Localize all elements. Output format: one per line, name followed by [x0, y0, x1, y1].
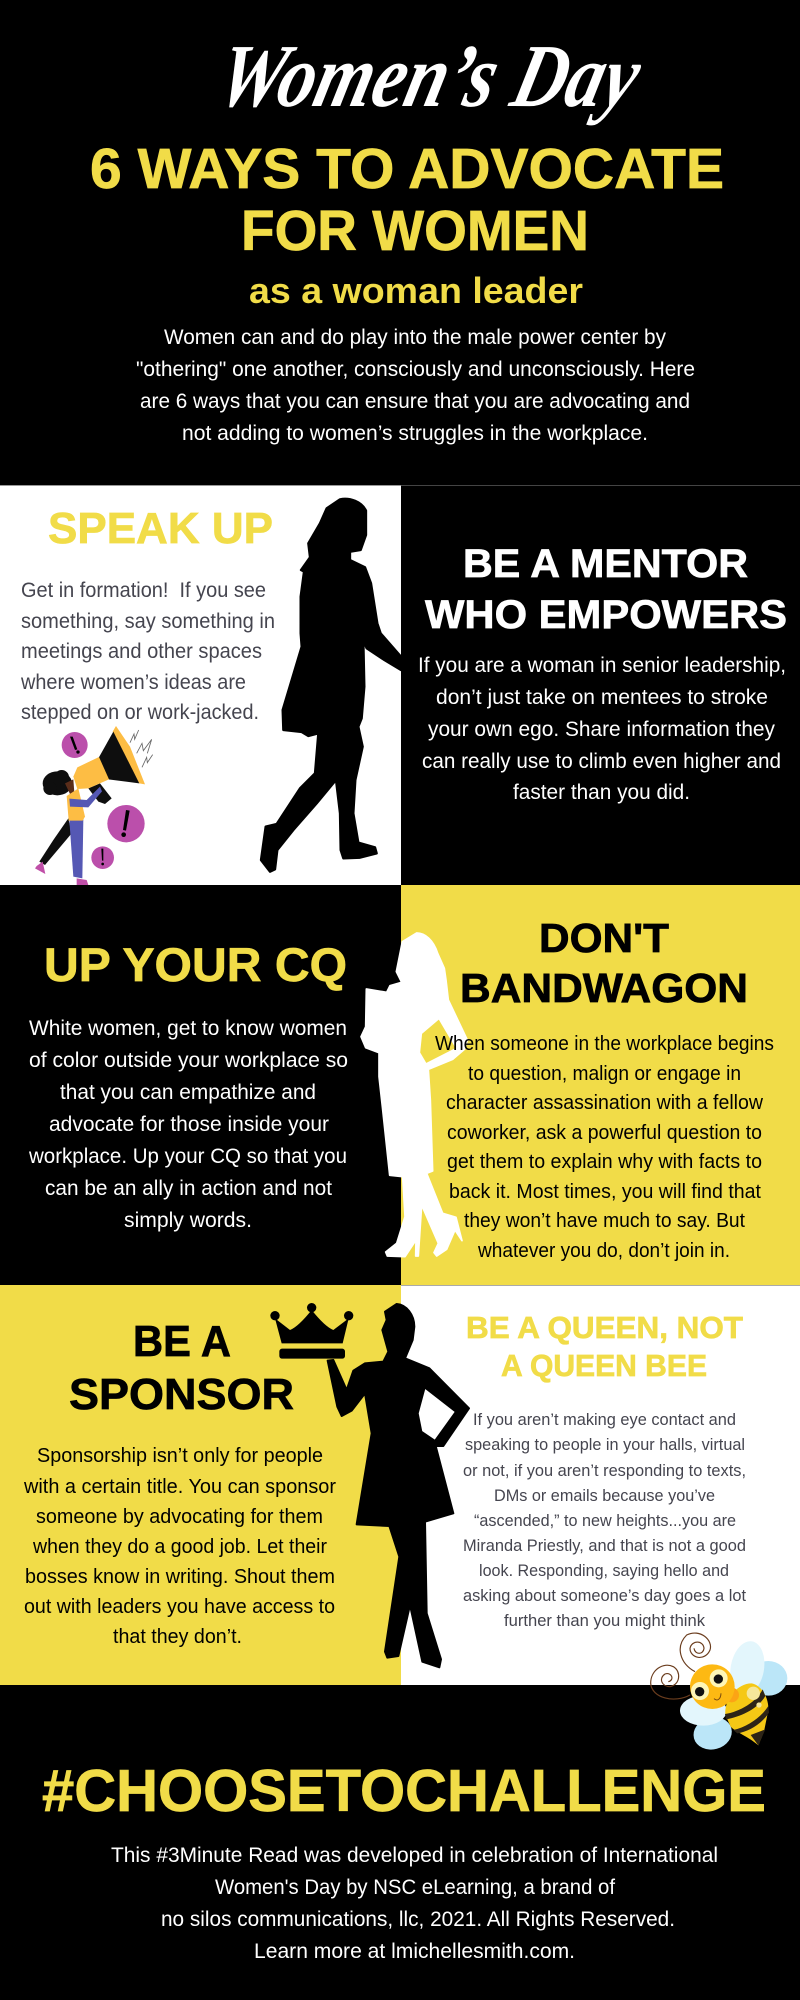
text: don't bandwagon: whatever you do, don’t join in. [477, 1240, 730, 1262]
text: be a sponsor: bosses know in writing. Shout them [25, 1565, 335, 1588]
text: don't bandwagon [435, 1033, 774, 1262]
heading: speak up: SPEAK UP [48, 504, 273, 553]
text: up your cq: workplace. Up your CQ so that you [28, 1145, 347, 1168]
text: be a queen: look. Responding, saying hello and [479, 1561, 729, 1580]
text: don't bandwagon: character assassination with a fellow [446, 1092, 764, 1114]
main heading: FOR WOMEN [241, 199, 589, 263]
text: be a mentor: don’t just take on mentees to stroke [436, 686, 768, 709]
text: be a queen: Miranda Priestly, and that is not a good [463, 1536, 746, 1555]
heading: be a sponsor: SPONSOR [69, 1370, 294, 1419]
row 1: speak up and mentor [0, 485, 800, 885]
heading: up your cq: UP YOUR CQ [44, 938, 347, 991]
heading: be a queen [466, 1310, 743, 1383]
text: speak up: meetings and other spaces [21, 640, 262, 663]
heading: be a mentor: BE A MENTOR [463, 542, 748, 586]
text: be a mentor [418, 654, 786, 804]
subheading: as a woman leader [249, 270, 583, 311]
text: be a queen: If you aren’t making eye contact and [473, 1410, 736, 1429]
text: be a sponsor: with a certain title. You can sponsor [23, 1475, 336, 1498]
text: speak up [20, 579, 275, 724]
text: be a queen: further than you might think [504, 1611, 706, 1630]
main heading: 6 WAYS TO ADVOCATE [90, 137, 724, 201]
panel: speak up background [0, 485, 401, 885]
text: be a queen: DMs or emails because you’ve [494, 1486, 715, 1505]
intro paragraph [136, 325, 695, 445]
text: be a queen: asking about someone’s day goes a lot [463, 1586, 746, 1605]
text: up your cq: White women, get to know women [29, 1017, 347, 1040]
text: don't bandwagon: to question, malign or engage in [468, 1063, 741, 1085]
text: don't bandwagon: When someone in the workplace begins [435, 1033, 774, 1055]
panel: be a mentor background [401, 485, 800, 885]
icon: woman with megaphone [35, 726, 153, 885]
silhouette: woman with folder [361, 933, 467, 1257]
footer credits text: no silos communications, llc, 2021. All Rights Reserved. [161, 1908, 675, 1931]
text: up your cq: of color outside your workplace so [29, 1049, 348, 1072]
text: up your cq: advocate for those inside your [49, 1113, 329, 1136]
heading: don't bandwagon [460, 915, 748, 1011]
text: speak up: something, say something in [21, 610, 275, 633]
footer credits text: Learn more at lmichellesmith.com. [254, 1940, 575, 1963]
row 2: up your CQ and don't bandwagon [0, 885, 800, 1285]
text: speak up: Get in formation! If you see [21, 579, 266, 602]
row 3: be a sponsor and queen bee [0, 1285, 800, 1685]
text: be a sponsor: someone by advocating for them [36, 1505, 323, 1528]
icon: crown on tray [270, 1303, 353, 1359]
heading: don't bandwagon: DON'T [539, 915, 669, 961]
text: be a mentor: If you are a woman in senior leadership, [418, 654, 786, 677]
heading: be a mentor [425, 542, 787, 637]
footer hashtag heading: #CHOOSETOCHALLENGE [42, 1758, 766, 1824]
footer credits text: This #3Minute Read was developed in celebration of International [111, 1844, 718, 1867]
text: don't bandwagon: they won’t have much to say. But [464, 1210, 745, 1232]
text: be a queen: speaking to people in your halls, virtual [465, 1435, 745, 1454]
text: don't bandwagon: get them to explain why with facts to [447, 1151, 762, 1173]
text: be a sponsor: that they don’t. [113, 1625, 242, 1648]
icon: bee [651, 1633, 787, 1754]
panel: up your cq background [0, 885, 401, 1285]
footer credits text: Women's Day by NSC eLearning, a brand of [215, 1876, 615, 1899]
text: be a mentor: your own ego. Share information they [428, 718, 775, 741]
text: don't bandwagon: coworker, ask a powerful question to [447, 1122, 762, 1144]
text: be a sponsor: when they do a good job. Let their [32, 1535, 327, 1558]
text: be a queen: or not, if you aren’t responding to texts, [463, 1461, 746, 1480]
text: be a mentor: can really use to climb even higher and [422, 750, 781, 773]
intro paragraph: Women can and do play into the male power center by [164, 325, 666, 349]
text: up your cq [28, 1017, 348, 1232]
intro paragraph: are 6 ways that you can ensure that you are advocating and [140, 389, 690, 413]
text: don't bandwagon: back it. Most times, you will find that [449, 1181, 761, 1203]
silhouette: walking woman [261, 499, 401, 872]
text: be a sponsor: Sponsorship isn’t only for people [37, 1444, 323, 1467]
text: up your cq: simply words. [124, 1209, 252, 1232]
text: be a sponsor [23, 1444, 336, 1648]
text: speak up: stepped on or work-jacked. [21, 701, 259, 724]
text: up your cq: can be an ally in action and not [45, 1177, 332, 1200]
text: speak up: where women’s ideas are [20, 671, 246, 694]
heading: don't bandwagon: BANDWAGON [460, 965, 748, 1011]
script title: Women’s Day [208, 26, 651, 126]
intro paragraph: "othering" one another, consciously and unconsciously. Here [136, 357, 695, 381]
panel: don't bandwagon background [401, 885, 800, 1285]
text: be a queen: “ascended,” to new heights...you are [474, 1511, 736, 1530]
text: be a queen [463, 1410, 746, 1630]
main heading [90, 137, 724, 263]
text: be a sponsor: out with leaders you have access to [24, 1595, 335, 1618]
heading: be a mentor: WHO EMPOWERS [425, 593, 787, 637]
header section [0, 0, 800, 485]
footer section [0, 1685, 800, 2000]
text: up your cq: that you can empathize and [60, 1081, 316, 1104]
silhouette: woman holding tray [328, 1304, 469, 1667]
heading: be a sponsor: BE A [133, 1317, 231, 1366]
intro paragraph: not adding to women’s struggles in the workplace. [182, 421, 648, 445]
footer credits text [111, 1844, 718, 1963]
heading: be a queen: BE A QUEEN, NOT [466, 1310, 743, 1345]
heading: be a sponsor [69, 1317, 294, 1419]
heading: be a queen: A QUEEN BEE [501, 1348, 707, 1383]
text: be a mentor: faster than you did. [513, 781, 690, 804]
panel: be a sponsor background [0, 1285, 401, 1685]
panel: be a queen background [401, 1285, 800, 1685]
